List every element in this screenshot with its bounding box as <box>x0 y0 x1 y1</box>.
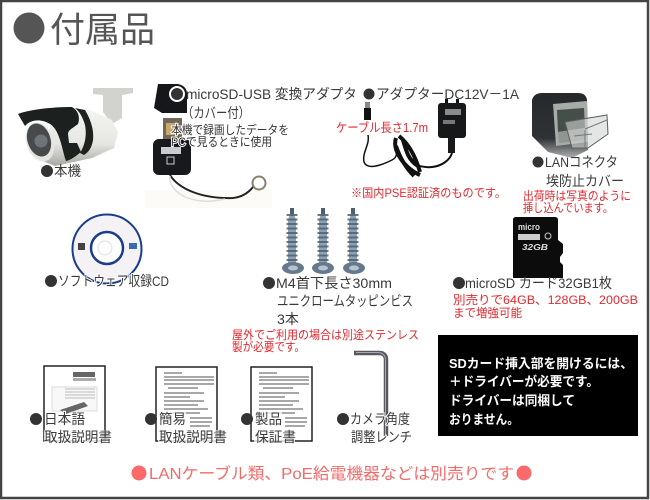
caption: screws <box>263 275 413 327</box>
caption: Japanese manual <box>30 411 112 445</box>
title: 付属品 <box>50 11 155 50</box>
caption: screws: M4首下長さ30mm <box>276 275 392 291</box>
caption: microSD-USB adapter: （カバー付） <box>182 105 250 121</box>
panel: screwdriver notice: SDカード挿入部を開けるには、 <box>449 356 633 371</box>
icon: microSD card: 32GB <box>522 243 548 252</box>
note: PSE certification: ※国内PSE認証済のものです。 <box>351 186 506 200</box>
caption: microSD-USB adapter: PCで見るときに使用 <box>171 134 272 149</box>
caption: hex wrench <box>337 411 412 445</box>
icon: Japanese manual <box>44 366 105 441</box>
icon: AC adapter with cable <box>364 99 466 176</box>
icon: warranty sheet <box>251 367 312 441</box>
caption: screws: ユニクロームタッピンビス <box>277 293 413 309</box>
caption: LAN connector cover: 埃防止カバー <box>546 173 624 189</box>
caption: LAN connector cover: LANコネクタ <box>545 154 618 170</box>
caption: hex wrench: 調整レンチ <box>351 429 412 445</box>
icon: three tapping screws <box>282 208 365 274</box>
note: microSD upgrade <box>453 292 638 320</box>
caption: microSD-USB adapter: microSD-USB 変換アダプタ <box>186 86 357 102</box>
note: stainless screws <box>232 327 419 354</box>
caption: warranty: 保証書 <box>255 429 296 445</box>
caption: quick manual <box>145 411 227 445</box>
panel: screwdriver notice: ＋ドライバーが必要です。 <box>449 374 599 389</box>
caption: Japanese manual: 日本語 <box>44 411 85 427</box>
caption: warranty: 製品 <box>255 411 282 427</box>
icon: microSD-USB adapter <box>145 84 272 208</box>
panel: screwdriver notice: ドライバーは同梱して <box>449 393 575 408</box>
note: shipping state: 出荷時は写真のように <box>523 189 631 203</box>
icon: LAN connector dust cover <box>532 93 608 158</box>
note: microSD upgrade: まで増強可能 <box>453 306 522 320</box>
caption: software CD: ソフトウェア収録CD <box>58 273 169 289</box>
note: stainless screws: 製が必要です。 <box>232 339 305 354</box>
caption: quick manual: 簡易 <box>159 411 186 427</box>
caption: screws: 3本 <box>277 311 299 327</box>
caption: hex wrench: カメラ角度 <box>350 411 410 427</box>
icon: quick manual <box>156 367 217 441</box>
icon: microSD card: micro <box>518 222 540 232</box>
icon: software CD <box>72 214 142 284</box>
note: stainless screws: 屋外でご利用の場合は別途ステンレス <box>232 327 419 342</box>
caption: camera <box>41 163 81 179</box>
caption: warranty <box>241 411 296 445</box>
icon: microSD card <box>513 217 563 278</box>
note: shipping state <box>523 189 631 215</box>
note: microSD upgrade: 別売りで64GB、128GB、200GB <box>453 292 638 307</box>
note: cable length: ケーブル長さ1.7m <box>336 120 428 135</box>
icon: bullet camera <box>18 88 133 166</box>
caption: microSD card: microSD カード32GB1枚 <box>465 275 612 291</box>
note: shipping state: 挿し込んでいます。 <box>523 201 613 215</box>
caption: LAN connector cover <box>532 154 624 189</box>
caption: quick manual: 取扱説明書 <box>159 429 227 445</box>
panel: screwdriver notice: おりません。 <box>449 412 519 427</box>
icon: hex wrench <box>354 352 386 436</box>
caption: camera: 本機 <box>54 163 81 179</box>
caption: Japanese manual: 取扱説明書 <box>44 429 112 445</box>
footer note: LANケーブル類、PoE給電機器などは別売りです <box>149 464 514 483</box>
caption: microSD-USB adapter <box>170 86 357 149</box>
caption: microSD-USB adapter: 本機で録画したデータを <box>171 122 289 137</box>
panel: screwdriver notice <box>438 335 638 436</box>
caption: AC adapter: アダプターDC12V－1A <box>376 86 520 102</box>
